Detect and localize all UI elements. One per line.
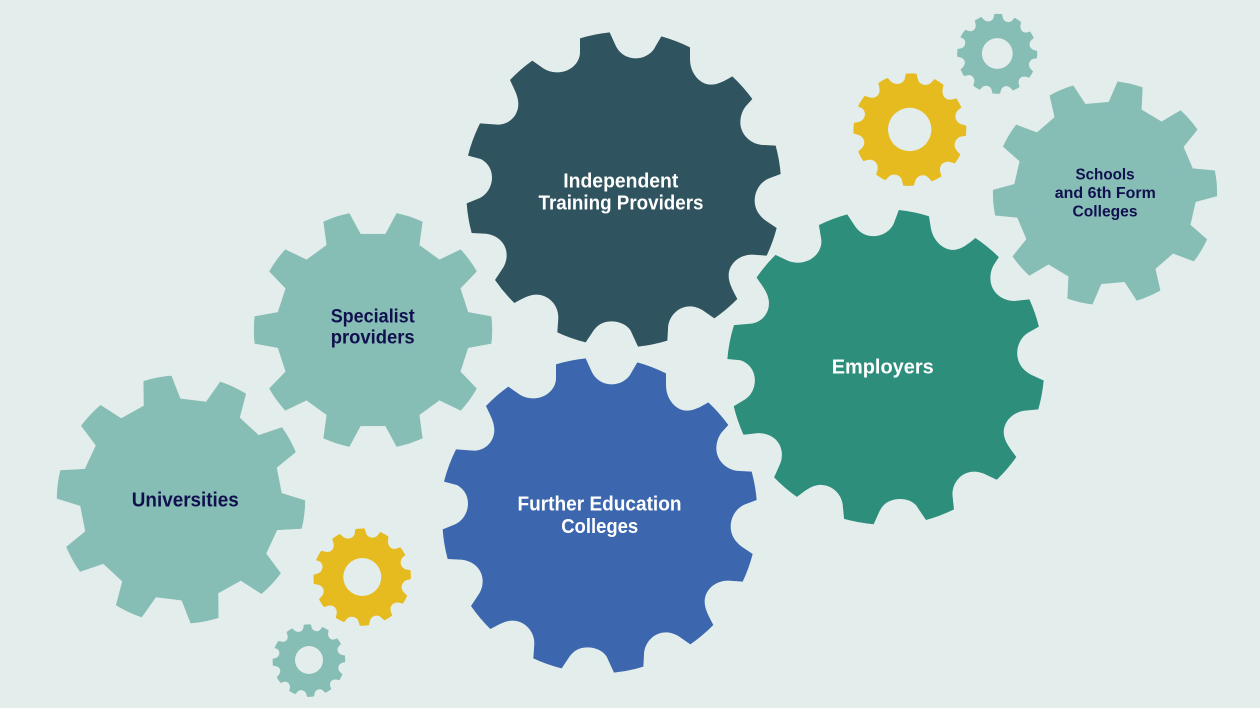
gear: Employers	[706, 187, 1067, 548]
icon: small teal gear, top	[950, 7, 1044, 101]
label: Schools and 6th Form Colleges: and 6th Form	[1055, 185, 1156, 202]
label: Employers: Employers	[832, 356, 934, 378]
gear: Further Education Colleges	[443, 358, 757, 673]
label: Further Education Colleges: Further Education	[518, 494, 682, 516]
label: Further Education Colleges: Colleges	[561, 516, 638, 538]
gear shape: Schools and 6th Form Colleges	[982, 65, 1228, 321]
icon: small yellow gear, bottom	[307, 522, 417, 632]
label: Specialist providers: providers	[331, 327, 415, 348]
label: Independent Training Providers: Training Providers	[538, 192, 704, 214]
gear shape: Further Education Colleges	[443, 358, 757, 673]
gear shape: Independent Training Providers	[467, 32, 781, 347]
gear shape: Specialist providers	[252, 204, 494, 456]
gear: Universities	[40, 354, 322, 645]
label: Schools and 6th Form Colleges: Colleges	[1072, 203, 1138, 220]
gear: Independent Training Providers	[467, 32, 781, 347]
label: Specialist providers: Specialist	[331, 307, 415, 328]
gear: Schools and 6th Form Colleges	[982, 65, 1228, 321]
label: Schools and 6th Form Colleges: Schools	[1076, 167, 1135, 184]
gear shape: Employers	[706, 187, 1067, 548]
label: Universities: Universities	[132, 490, 239, 512]
label: Independent Training Providers: Independent	[563, 171, 679, 193]
icon: small yellow gear, top	[843, 63, 976, 196]
icon: small teal gear, bottom	[268, 620, 350, 701]
gear: Specialist providers	[252, 204, 494, 456]
gear shape: Universities	[40, 354, 322, 645]
